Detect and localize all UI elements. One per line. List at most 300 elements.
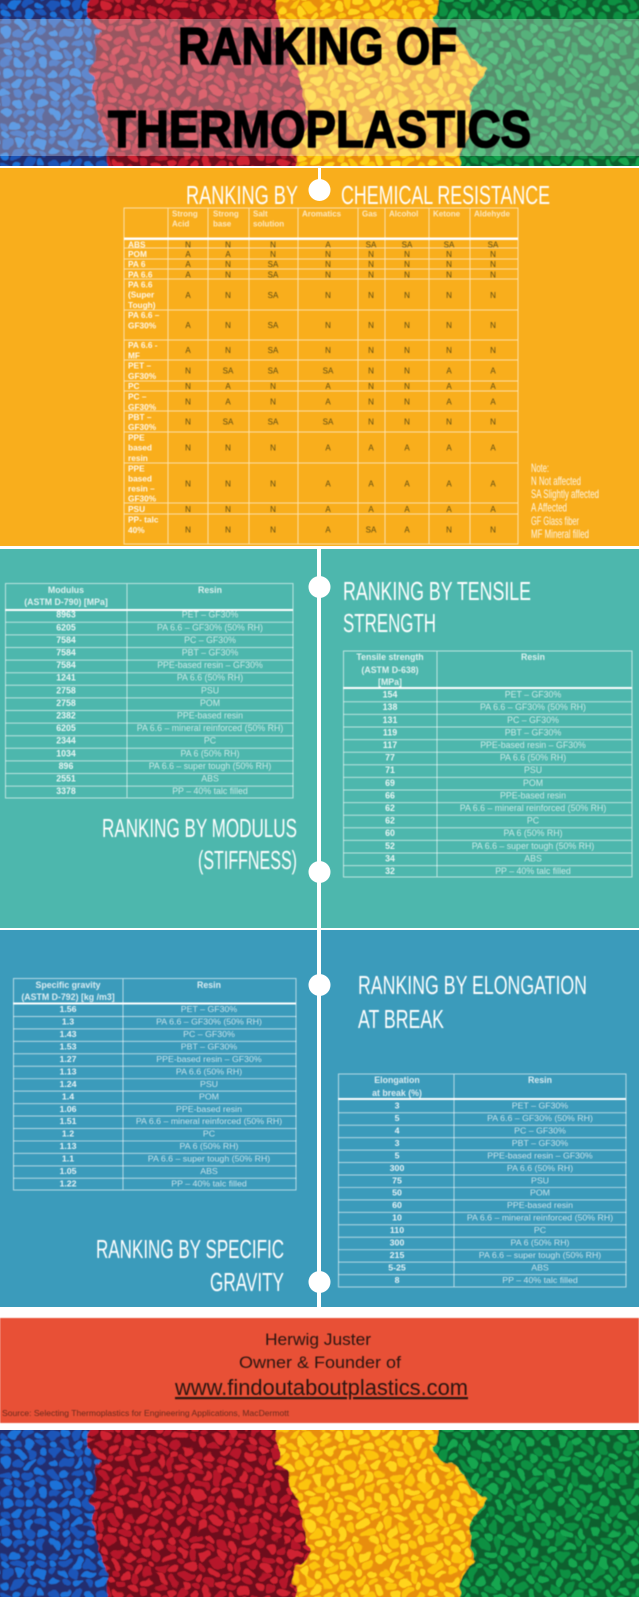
table: specific gravity: 1.27: [59, 1054, 77, 1064]
table: chemical resistance: [124, 208, 518, 544]
table: chemical resistance: SA: [444, 240, 455, 250]
table: elongation at break: 3: [395, 1138, 400, 1148]
table: specific gravity: 1.06: [59, 1104, 77, 1114]
table: chemical resistance: Strong: [172, 210, 198, 218]
table: chemical resistance: PET –: [128, 361, 151, 371]
table: chemical resistance: SA: [488, 240, 499, 250]
table: modulus: PA 6 (50% RH): [180, 748, 240, 758]
table: modulus: 8963: [56, 610, 76, 620]
table: specific gravity: 1.13: [59, 1066, 77, 1076]
table: chemical resistance: N: [404, 260, 410, 269]
table: chemical resistance: A: [446, 505, 452, 514]
table: chemical resistance: N: [185, 444, 191, 453]
table: elongation at break: at break (%): [372, 1088, 422, 1098]
table: tensile strength: 52: [385, 841, 395, 851]
table: chemical resistance: A: [490, 479, 496, 488]
legend note: MF Mineral filled: [531, 527, 589, 541]
footer panel: author credit: Source: Selecting Thermoplastics for Engineering Applications, MacDermott: [2, 1408, 290, 1418]
footer: pellet photo: [0, 1410, 639, 1597]
table: specific gravity: 1.4: [62, 1091, 74, 1101]
table: specific gravity: [13, 978, 296, 1190]
table: specific gravity: PA 6.6 – mineral reinforced (50% RH): [136, 1116, 282, 1126]
table: chemical resistance: A: [225, 250, 231, 259]
table: chemical resistance: PPE: [128, 463, 145, 473]
table: chemical resistance: A: [325, 479, 331, 488]
table: specific gravity: PET – GF30%: [181, 1004, 237, 1014]
table: chemical resistance: N: [490, 418, 496, 427]
table: specific gravity: 1.24: [59, 1079, 77, 1089]
table: specific gravity: ABS: [200, 1166, 218, 1176]
table: chemical resistance: A: [368, 479, 374, 488]
table: tensile strength: PA 6.6 – super tough (50% RH): [472, 841, 594, 851]
table: chemical resistance: A: [325, 444, 331, 453]
timeline spine with circles: [308, 168, 330, 1307]
table: chemical resistance: SA: [268, 346, 279, 355]
table: chemical resistance: Gas: [362, 210, 378, 218]
table: tensile strength: 77: [385, 753, 395, 763]
table: tensile strength: PSU: [524, 765, 542, 775]
table: chemical resistance: N: [185, 505, 191, 514]
table: specific gravity: PBT – GF30%: [181, 1042, 237, 1052]
table: chemical resistance: N: [325, 291, 331, 300]
table: modulus: PA 6.6 (50% RH): [177, 673, 243, 683]
table: chemical resistance: N: [270, 398, 276, 407]
table: chemical resistance: SA: [268, 270, 279, 280]
table: chemical resistance: A: [185, 270, 191, 280]
heading: modulus: (STIFFNESS): [198, 847, 297, 875]
table: elongation at break: PA 6.6 – GF30% (50% RH): [487, 1113, 593, 1123]
table: chemical resistance: Ketone: [433, 210, 461, 218]
table: elongation at break: 4: [395, 1126, 400, 1135]
table: tensile strength: (ASTM D-638): [361, 665, 419, 675]
table: chemical resistance: N: [404, 382, 410, 391]
heading: tensile strength: RANKING BY TENSILE: [343, 578, 531, 606]
table: chemical resistance: N: [270, 382, 276, 391]
table: tensile strength: 131: [383, 715, 397, 725]
table: tensile strength: 119: [383, 727, 397, 737]
table: chemical resistance: Aromatics: [302, 210, 342, 218]
table: elongation at break: 110: [390, 1225, 404, 1235]
table: modulus: PA 6.6 – GF30% (50% RH): [157, 622, 263, 632]
table: chemical resistance: Salt: [253, 210, 268, 218]
table: chemical resistance: N: [225, 240, 231, 250]
table: tensile strength: 62: [385, 816, 395, 826]
table: chemical resistance: N: [225, 525, 231, 534]
table: chemical resistance: A: [325, 525, 331, 534]
table: chemical resistance: N: [404, 321, 410, 330]
table: modulus: Resin: [198, 585, 222, 595]
table: chemical resistance: N: [404, 291, 410, 300]
table: chemical resistance: N: [404, 398, 410, 407]
table: chemical resistance: N: [368, 270, 374, 280]
table: specific gravity: PP – 40% talc filled: [171, 1179, 247, 1188]
table: chemical resistance: GF30%: [128, 402, 157, 412]
table: chemical resistance: SA: [223, 418, 234, 427]
table: chemical resistance: PA 6.6 –: [128, 310, 160, 320]
table: elongation at break: PP – 40% talc filled: [502, 1275, 578, 1285]
table: chemical resistance: A: [490, 367, 496, 376]
table: chemical resistance: N: [270, 525, 276, 534]
table: chemical resistance: N: [368, 367, 374, 376]
table: elongation at break: 5: [395, 1113, 400, 1123]
table: modulus: PC – GF30%: [184, 635, 236, 645]
table: chemical resistance: N: [368, 382, 374, 391]
table: chemical resistance: base: [213, 220, 232, 228]
table: chemical resistance: A: [368, 444, 374, 453]
table: specific gravity: PPE-based resin – GF30%: [156, 1054, 262, 1064]
table: elongation at break: PBT – GF30%: [512, 1138, 568, 1148]
table: chemical resistance: A: [446, 398, 452, 407]
table: modulus: [5, 584, 294, 798]
table: elongation at break: PC: [534, 1225, 546, 1235]
table: chemical resistance: SA: [268, 418, 279, 427]
table: chemical resistance: PC: [128, 381, 140, 391]
table: elongation at break: 10: [392, 1213, 402, 1223]
table: chemical resistance: N: [490, 270, 496, 280]
heading: elongation at break: AT BREAK: [358, 1006, 444, 1034]
table: chemical resistance: (Super: [128, 290, 155, 300]
table: elongation at break: PPE-based resin: [507, 1200, 573, 1210]
table: chemical resistance: A: [446, 382, 452, 391]
table: modulus: 1034: [56, 748, 76, 758]
table: chemical resistance: N: [270, 240, 276, 250]
table: chemical resistance: N: [446, 525, 452, 534]
table: chemical resistance: resin –: [128, 484, 155, 494]
table: chemical resistance: A: [225, 382, 231, 391]
title: THERMOPLASTICS: [108, 101, 531, 159]
table: chemical resistance: PC –: [128, 392, 147, 402]
footer panel: author credit: [0, 1318, 639, 1423]
table: modulus: 7584: [56, 660, 76, 670]
table: chemical resistance: ABS: [128, 240, 146, 250]
table: chemical resistance: A: [225, 398, 231, 407]
table: elongation at break: PA 6.6 (50% RH): [507, 1163, 573, 1173]
table: tensile strength: PA 6.6 – mineral reinforced (50% RH): [460, 803, 606, 813]
table: chemical resistance: N: [446, 270, 452, 280]
table: chemical resistance: PA 6: [128, 259, 146, 269]
table: specific gravity: PA 6.6 – super tough (50% RH): [148, 1154, 270, 1164]
table: specific gravity: 1.56: [59, 1004, 77, 1014]
table: elongation at break: PA 6.6 – super tough (50% RH): [479, 1250, 601, 1260]
heading: modulus: [102, 815, 297, 875]
table: modulus: PA 6.6 – super tough (50% RH): [149, 761, 271, 771]
table: modulus: 3378: [56, 786, 76, 796]
table: chemical resistance: N: [368, 291, 374, 300]
table: tensile strength: PET – GF30%: [505, 690, 561, 700]
table: chemical resistance: N: [368, 418, 374, 427]
table: elongation at break: Resin: [528, 1075, 552, 1085]
table: tensile strength: 60: [385, 828, 395, 838]
table: specific gravity: 1.51: [59, 1116, 77, 1126]
table: chemical resistance: A: [446, 444, 452, 453]
heading: chemical resistance: [186, 182, 550, 210]
table: specific gravity: 1.22: [59, 1179, 77, 1188]
table: modulus: 896: [59, 761, 73, 771]
table: chemical resistance: N: [490, 525, 496, 534]
table: specific gravity: 1.1: [62, 1154, 74, 1164]
table: tensile strength: Tensile strength: [356, 652, 424, 662]
table: chemical resistance: SA: [366, 525, 377, 534]
table: chemical resistance: N: [185, 418, 191, 427]
table: chemical resistance: Tough): [128, 300, 156, 310]
table: tensile strength: 71: [385, 765, 395, 775]
table: chemical resistance: N: [185, 367, 191, 376]
table: tensile strength: PC: [527, 816, 540, 826]
table: chemical resistance: N: [368, 398, 374, 407]
table: elongation at break: 5: [395, 1150, 400, 1160]
table: chemical resistance: PSU: [128, 504, 145, 514]
table: chemical resistance: based: [128, 473, 152, 483]
table: chemical resistance: SA: [323, 367, 334, 376]
table: chemical resistance: SA: [323, 418, 334, 427]
table: specific gravity: PA 6 (50% RH): [180, 1141, 239, 1151]
table: chemical resistance: N: [325, 321, 331, 330]
white gap above footer pellet photo: [0, 1307, 639, 1430]
table: chemical resistance: N: [225, 321, 231, 330]
table: chemical resistance: N: [270, 505, 276, 514]
table: chemical resistance: PA 6.6 -: [128, 340, 158, 350]
table: chemical resistance: A: [490, 444, 496, 453]
table: chemical resistance: PPE: [128, 432, 145, 442]
table: tensile strength: 154: [383, 690, 397, 700]
table: chemical resistance: N: [368, 321, 374, 330]
table: chemical resistance: N: [446, 321, 452, 330]
heading: elongation at break: [358, 972, 587, 1034]
table: specific gravity: Resin: [197, 980, 221, 990]
table: elongation at break: PPE-based resin – GF30%: [487, 1150, 593, 1160]
table: chemical resistance: POM: [128, 249, 147, 259]
table: chemical resistance: SA: [366, 240, 377, 250]
header: pellet photo banner: [0, 0, 639, 188]
heading: specific gravity: GRAVITY: [210, 1269, 284, 1297]
table: chemical resistance: N: [270, 479, 276, 488]
table: chemical resistance: PBT –: [128, 412, 152, 422]
table: specific gravity: PPE-based resin: [176, 1104, 242, 1114]
table: modulus: 1241: [56, 673, 76, 683]
table: chemical resistance: A: [490, 398, 496, 407]
table: chemical resistance: N: [490, 346, 496, 355]
table: elongation at break: PET – GF30%: [512, 1101, 568, 1111]
table: chemical resistance: N: [185, 382, 191, 391]
table: chemical resistance: N: [446, 250, 452, 259]
title: RANKING OF: [178, 18, 457, 76]
table: specific gravity: PA 6.6 (50% RH): [176, 1066, 242, 1076]
table: chemical resistance: N: [185, 525, 191, 534]
table: chemical resistance: N: [490, 321, 496, 330]
table: specific gravity: 1.43: [59, 1029, 77, 1039]
table: tensile strength: PA 6.6 – GF30% (50% RH): [480, 702, 586, 712]
table: chemical resistance: MF: [128, 350, 140, 360]
legend note: GF Glass fiber: [531, 514, 579, 528]
table: chemical resistance: A: [325, 382, 331, 391]
table: chemical resistance: N: [490, 260, 496, 269]
title: [108, 18, 531, 159]
table: tensile strength: PA 6 (50% RH): [504, 828, 563, 838]
table: modulus: 2382: [56, 711, 76, 721]
table: specific gravity: POM: [199, 1091, 219, 1101]
table: specific gravity: 1.53: [59, 1042, 77, 1052]
table: chemical resistance: A: [185, 346, 191, 355]
table: specific gravity: PSU: [200, 1079, 218, 1089]
panel: elongation and specific gravity background: [0, 930, 639, 1307]
table: chemical resistance: N: [225, 444, 231, 453]
table: chemical resistance: A: [404, 525, 410, 534]
table: elongation at break: PSU: [531, 1175, 549, 1185]
table: elongation at break: 50: [392, 1188, 402, 1198]
table: chemical resistance: A: [185, 291, 191, 300]
table: specific gravity: (ASTM D-792) [kg /m3]: [21, 992, 115, 1002]
table: chemical resistance: GF30%: [128, 422, 157, 432]
table: chemical resistance: N: [225, 260, 231, 269]
table: modulus: PPE-based resin – GF30%: [157, 660, 263, 670]
table: tensile strength: 62: [385, 803, 395, 813]
table: chemical resistance: A: [446, 479, 452, 488]
table: chemical resistance: PA 6.6: [128, 279, 153, 289]
table: chemical resistance: A: [325, 240, 331, 250]
table: chemical resistance: N: [404, 367, 410, 376]
footer panel: author credit: Owner & Founder of: [239, 1353, 401, 1372]
legend note: Note:: [531, 461, 549, 475]
table: chemical resistance: N: [404, 346, 410, 355]
table: elongation at break: 8: [395, 1275, 400, 1285]
table: modulus: 2758: [56, 685, 76, 695]
table: modulus: 2758: [56, 698, 76, 708]
table: tensile strength: POM: [523, 778, 543, 788]
table: chemical resistance: solution: [253, 220, 284, 228]
table: chemical resistance: N: [325, 346, 331, 355]
table: chemical resistance: Strong: [213, 210, 239, 218]
table: chemical resistance: PA 6.6: [128, 270, 153, 280]
table: tensile strength: 32: [385, 866, 395, 876]
table: modulus: 2344: [56, 736, 76, 746]
table: chemical resistance: A: [404, 444, 410, 453]
table: elongation at break: 300: [390, 1163, 404, 1173]
table: modulus: PP – 40% talc filled: [172, 786, 248, 796]
table: chemical resistance: N: [225, 346, 231, 355]
table: chemical resistance: A: [490, 505, 496, 514]
table: chemical resistance: N: [368, 260, 374, 269]
table: chemical resistance: GF30%: [128, 320, 157, 330]
table: chemical resistance: PP- talc: [128, 514, 159, 524]
table: chemical resistance: A: [185, 250, 191, 259]
table: specific gravity: PC – GF30%: [183, 1029, 235, 1039]
table: tensile strength: 34: [385, 853, 395, 863]
legend note: A Affected: [531, 500, 567, 514]
table: tensile strength: ABS: [524, 853, 542, 863]
table: chemical resistance: N: [490, 250, 496, 259]
table: chemical resistance: N: [404, 250, 410, 259]
table: tensile strength: 66: [385, 790, 395, 800]
table: chemical resistance: N: [368, 346, 374, 355]
table: chemical resistance: based: [128, 443, 152, 453]
table: modulus: Modulus: [48, 585, 84, 595]
table: elongation at break: ABS: [531, 1262, 549, 1272]
table: chemical resistance: N: [185, 240, 191, 250]
table: specific gravity: PA 6.6 – GF30% (50% RH): [156, 1017, 262, 1027]
table: modulus: ABS: [201, 774, 219, 784]
legend note: N Not affected: [531, 474, 581, 488]
legend note: SA Slightly affected: [531, 487, 599, 501]
table: elongation at break: POM: [530, 1188, 550, 1198]
table: chemical resistance: N: [404, 270, 410, 280]
table: chemical resistance: N: [185, 398, 191, 407]
table: chemical resistance: N: [225, 479, 231, 488]
table: modulus: PA 6.6 – mineral reinforced (50% RH): [137, 723, 283, 733]
table: chemical resistance: N: [490, 291, 496, 300]
heading: specific gravity: [96, 1236, 284, 1297]
table: chemical resistance: A: [490, 382, 496, 391]
table: tensile strength: 117: [383, 740, 397, 750]
table: modulus: 7584: [56, 648, 76, 658]
table: chemical resistance: A: [404, 505, 410, 514]
table: modulus: 2551: [56, 774, 76, 784]
table: chemical resistance: A: [368, 505, 374, 514]
table: specific gravity: 1.13: [59, 1141, 77, 1151]
heading: chemical resistance: RANKING BY: [186, 182, 298, 210]
table: modulus: PPE-based resin: [177, 711, 243, 721]
heading: tensile strength: [343, 578, 531, 638]
table: chemical resistance: N: [325, 250, 331, 259]
panel: tensile and modulus background: [0, 549, 639, 928]
table: modulus: (ASTM D-790) [MPa]: [24, 597, 108, 607]
table: chemical resistance: GF30%: [128, 494, 157, 504]
table: tensile strength: [343, 651, 632, 877]
table: elongation at break: PA 6 (50% RH): [511, 1238, 570, 1248]
table: tensile strength: PBT – GF30%: [505, 727, 561, 737]
table: chemical resistance: N: [225, 291, 231, 300]
table: chemical resistance: 40%: [128, 525, 145, 535]
table: chemical resistance: N: [446, 418, 452, 427]
table: elongation at break: 5-25: [388, 1262, 406, 1272]
table: chemical resistance: SA: [268, 260, 279, 269]
table: chemical resistance: N: [270, 444, 276, 453]
table: tensile strength: [MPa]: [378, 677, 402, 687]
table: elongation at break: PC – GF30%: [514, 1126, 566, 1135]
table: chemical resistance: N: [185, 479, 191, 488]
table: modulus: 7584: [56, 635, 76, 645]
table: chemical resistance: N: [446, 260, 452, 269]
table: chemical resistance: N: [446, 346, 452, 355]
table: tensile strength: PC – GF30%: [507, 715, 559, 725]
table: chemical resistance: SA: [223, 367, 234, 376]
table: chemical resistance: A: [446, 367, 452, 376]
table: chemical resistance: Acid: [172, 220, 189, 228]
heading: tensile strength: STRENGTH: [343, 610, 436, 638]
table: elongation at break: 215: [390, 1250, 404, 1260]
table: chemical resistance: N: [325, 270, 331, 280]
table: chemical resistance: SA: [268, 367, 279, 376]
table: chemical resistance: SA: [268, 291, 279, 300]
table: chemical resistance: N: [404, 418, 410, 427]
table: modulus: 6205: [56, 622, 76, 632]
table: chemical resistance: A: [185, 321, 191, 330]
heading: specific gravity: RANKING BY SPECIFIC: [96, 1236, 284, 1264]
table: modulus: 6205: [56, 723, 76, 733]
table: chemical resistance: resin: [128, 453, 148, 463]
table: chemical resistance: SA: [268, 321, 279, 330]
table: modulus: PBT – GF30%: [182, 648, 238, 658]
table: chemical resistance: A: [325, 505, 331, 514]
table: elongation at break: 60: [392, 1200, 402, 1210]
legend note: [531, 461, 599, 541]
table: modulus: PET – GF30%: [182, 610, 238, 620]
table: specific gravity: Specific gravity: [35, 980, 101, 990]
table: chemical resistance: A: [185, 260, 191, 269]
table: tensile strength: PPE-based resin: [500, 790, 566, 800]
table: modulus: PSU: [201, 685, 219, 695]
panel: chemical resistance background: [0, 168, 639, 546]
table: chemical resistance: A: [325, 398, 331, 407]
